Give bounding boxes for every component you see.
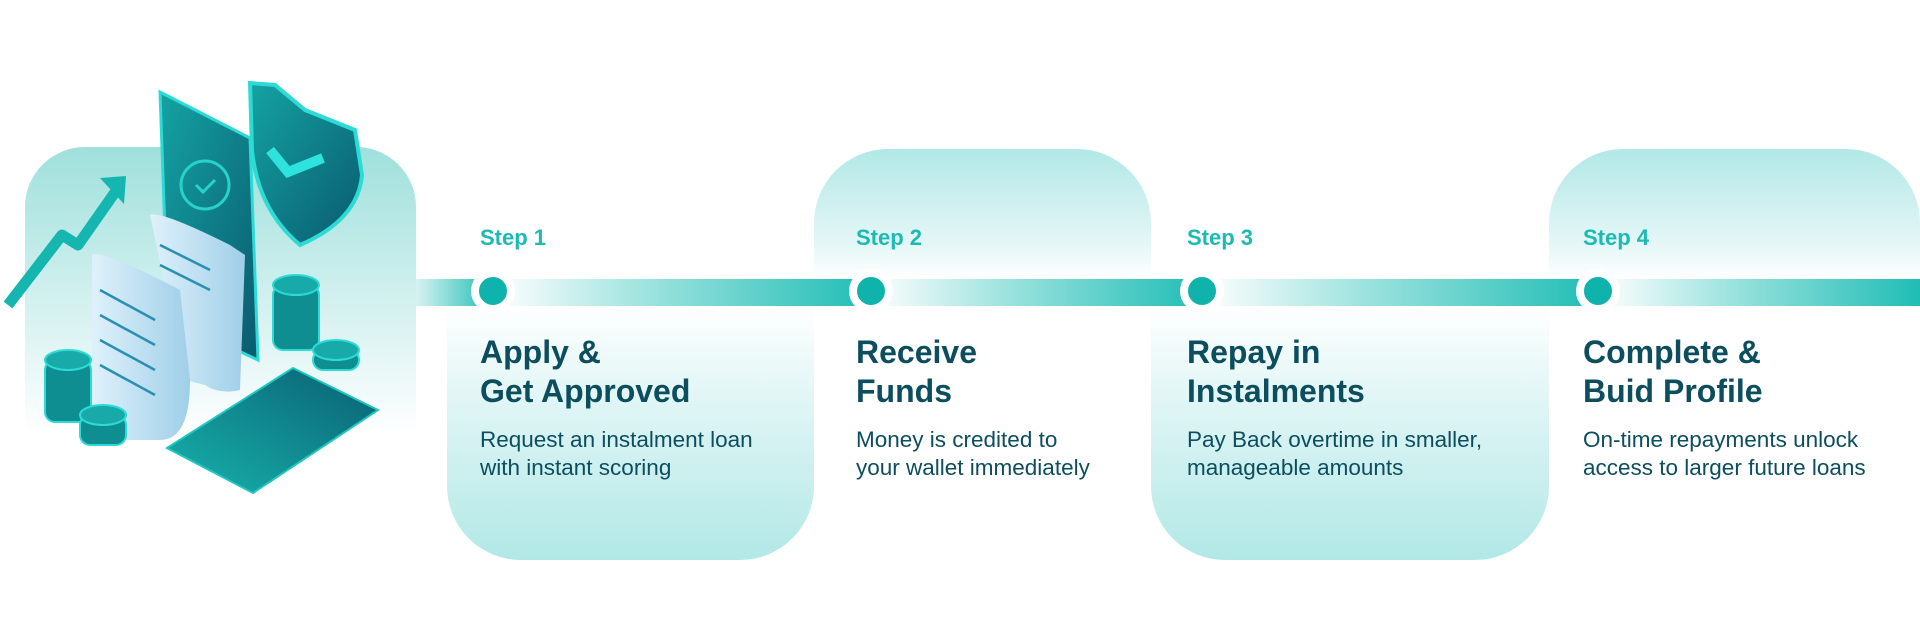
step 3 description (1187, 427, 1482, 480)
coins (45, 275, 359, 445)
panel: step 1 background (447, 306, 814, 560)
step 4 description: access to larger future loans (1583, 455, 1866, 480)
step 1 title: Apply & (480, 334, 601, 370)
step 3 description: Pay Back overtime in smaller, (1187, 427, 1482, 452)
step 3 description: manageable amounts (1187, 455, 1403, 480)
step 2 description: Money is credited to (856, 427, 1057, 452)
step 2 description: your wallet immediately (856, 455, 1090, 480)
timeline bar (416, 277, 1920, 306)
dot step 2 (849, 269, 893, 313)
step 4 description (1583, 427, 1866, 480)
step 1 title (480, 334, 690, 409)
step 4 title: Buid Profile (1583, 373, 1763, 409)
shield (250, 83, 362, 245)
step 2 title (856, 334, 977, 409)
step 1 label: Step 1 (480, 225, 546, 250)
card (167, 368, 378, 493)
step 1 description: with instant scoring (480, 455, 671, 480)
step 1 description: Request an instalment loan (480, 427, 753, 452)
step 3 title (1187, 334, 1365, 409)
step 1 title: Get Approved (480, 373, 690, 409)
step 3 label: Step 3 (1187, 225, 1253, 250)
step 4 label: Step 4 (1583, 225, 1649, 250)
step 2 title: Receive (856, 334, 977, 370)
dot step 1 (471, 269, 515, 313)
step 4 description: On-time repayments unlock (1583, 427, 1858, 452)
panel: step 3 background (1151, 306, 1549, 560)
step 1 description (480, 427, 753, 480)
step 2 description (856, 427, 1090, 480)
arrow (8, 188, 118, 305)
illustration: loan app (4, 80, 416, 494)
step 2 label: Step 2 (856, 225, 922, 250)
panel: step 4 background (1549, 149, 1920, 279)
step 3 title: Repay in (1187, 334, 1320, 370)
receipts (150, 214, 245, 392)
dot step 3 (1180, 269, 1224, 313)
step 4 title (1583, 334, 1763, 409)
dot step 4 (1576, 269, 1620, 313)
step 3 title: Instalments (1187, 373, 1365, 409)
phone (160, 92, 258, 360)
panel: step 2 background (814, 149, 1151, 279)
step 4 title: Complete & (1583, 334, 1761, 370)
step 2 title: Funds (856, 373, 952, 409)
